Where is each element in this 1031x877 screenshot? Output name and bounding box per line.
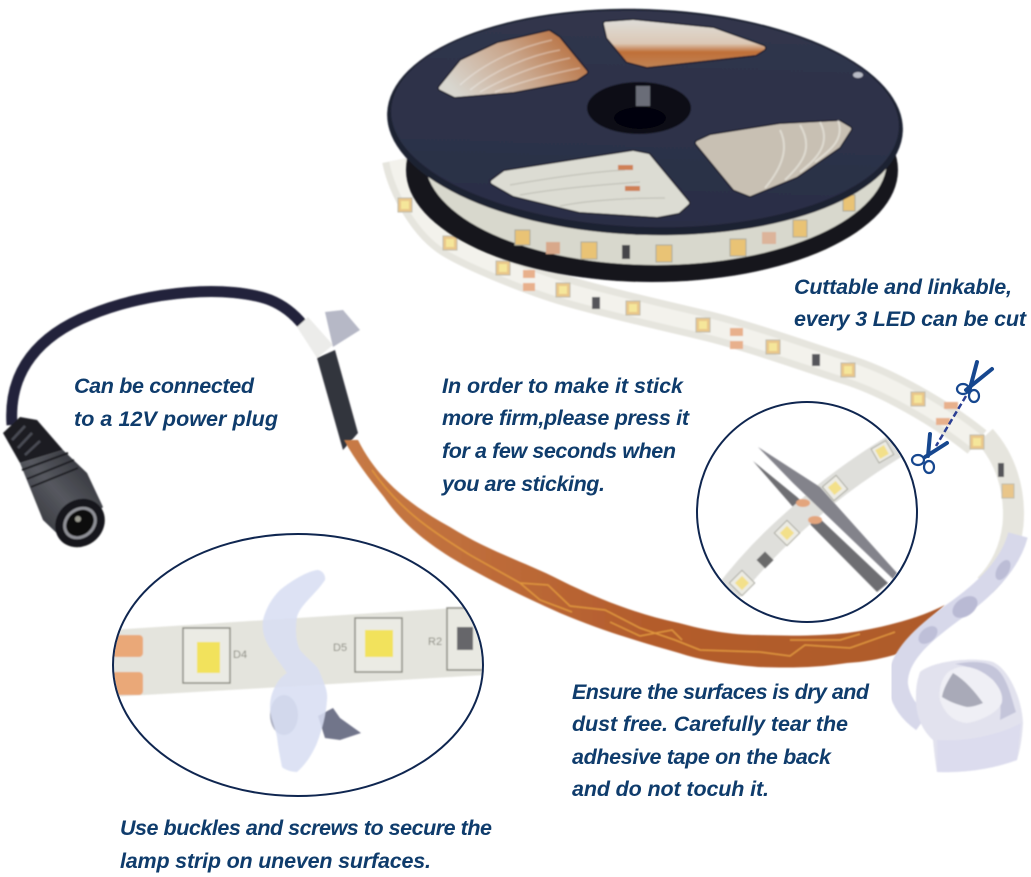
inset: LED D4: D4 [233, 649, 247, 661]
callout: surface preparation [572, 680, 870, 801]
callout: 12V power plug: Can be connected [74, 374, 255, 398]
icon: upper scissors [957, 362, 992, 402]
reel: top disk [383, 0, 907, 244]
callout: surface preparation: dust free. Carefully tear the [572, 712, 848, 736]
inset: resistor R2 [428, 608, 485, 670]
white sleeve and tag [297, 310, 360, 358]
photo: copper back of strip [344, 440, 945, 668]
callout: buckles and screws: lamp strip on uneven surfaces. [120, 849, 431, 873]
circle inset: buckle and screw [110, 534, 485, 796]
photo: adhesive backing and roll [898, 535, 1023, 772]
callout: buckles and screws [120, 816, 492, 873]
plug body [20, 450, 103, 543]
plug socket [45, 489, 115, 557]
cable [12, 292, 303, 425]
inset: LEDs [729, 441, 894, 596]
callout: press to stick: more firm,please press it [442, 406, 690, 430]
callout: 12V power plug: to a 12V power plug [74, 407, 278, 431]
inset: LED D4 [183, 628, 247, 683]
callout: buckles and screws: Use buckles and screws to secure the [120, 816, 492, 840]
reel: window top-left [441, 33, 585, 95]
reel: small dot [853, 72, 863, 78]
reel: lower flange [406, 58, 898, 282]
callout: cuttable and linkable: every 3 LED can be cut [794, 307, 1027, 331]
reel: window lower-right [698, 120, 849, 194]
backing band [898, 535, 1018, 722]
icon: dashed cut line [936, 396, 966, 446]
inset: upper tweezer blade [758, 447, 897, 579]
inset: copper pads [112, 635, 143, 695]
backing roll [916, 660, 1023, 772]
callout: press to stick: you are sticking. [441, 472, 605, 496]
inset: LED strip [725, 440, 905, 596]
photo: reel with LED strip [383, 0, 907, 282]
callout: press to stick: In order to make it stick [442, 374, 684, 398]
plug boot [3, 417, 63, 463]
inset: lower tweezer blade [753, 461, 888, 592]
callout: surface preparation: and do not tocuh it. [572, 777, 769, 801]
heat shrink tube [317, 350, 358, 450]
callout: surface preparation: adhesive tape on the back [572, 745, 832, 769]
callout: 12V power plug [74, 374, 278, 431]
inset: strip segment [110, 606, 485, 697]
photo: DC connector with cable [3, 292, 360, 557]
callout: press to stick [441, 374, 690, 496]
inset: LED D5: D5 [333, 642, 347, 654]
callout: surface preparation: Ensure the surfaces is dry and [572, 680, 870, 704]
callout: cuttable and linkable: Cuttable and linkable, [794, 275, 1012, 299]
reel: window top-right [606, 22, 763, 65]
inset: screw [270, 695, 361, 740]
reel: window lower-left [493, 153, 687, 215]
callout: cuttable and linkable [794, 275, 1027, 331]
photo: LED strip main run [397, 160, 1014, 585]
icon: lower scissors [912, 434, 947, 473]
circle inset: cutting with tweezers [697, 402, 917, 622]
callout: press to stick: for a few seconds when [442, 439, 676, 463]
inset: clear buckle [263, 570, 327, 772]
inset: resistor R2: R2 [428, 636, 442, 648]
inset: LED D5 [333, 618, 402, 672]
reel: hub [587, 82, 691, 134]
reel: wound strip band [425, 55, 887, 265]
